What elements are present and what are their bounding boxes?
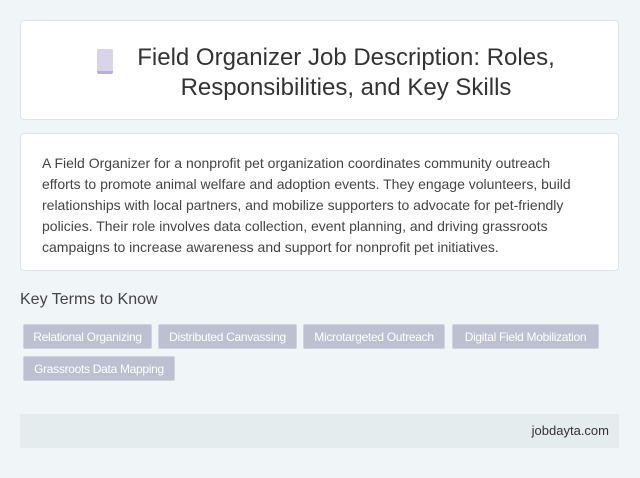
- title: Field Organizer Job Description: Roles, Responsibilities, and Key Skills: [137, 44, 555, 101]
- tags: Distributed Canvassing: [169, 330, 286, 344]
- footer: [20, 414, 619, 448]
- title card: [20, 20, 619, 120]
- tags: Microtargeted Outreach: [314, 330, 434, 344]
- heading: key terms: Key Terms to Know: [20, 291, 158, 308]
- icon: document: [97, 49, 113, 74]
- description card: [20, 133, 619, 271]
- tags: Digital Field Mobilization: [465, 330, 586, 344]
- tags: Relational Organizing: [33, 330, 142, 344]
- tags: Grassroots Data Mapping: [34, 362, 164, 376]
- footer: jobdayta.com: [532, 423, 609, 438]
- description text: A Field Organizer for a nonprofit pet organization coordinates community outreach efforts to promote animal welfare and adoption events. They engage volunteers, build relationships with local partners, and mobilize supporters to advocate for pet-friendly policies. Their role involves data collection, event planning, and driving grassroots campaigns to increase awareness and support for nonprofit pet initiatives.: [42, 155, 571, 255]
